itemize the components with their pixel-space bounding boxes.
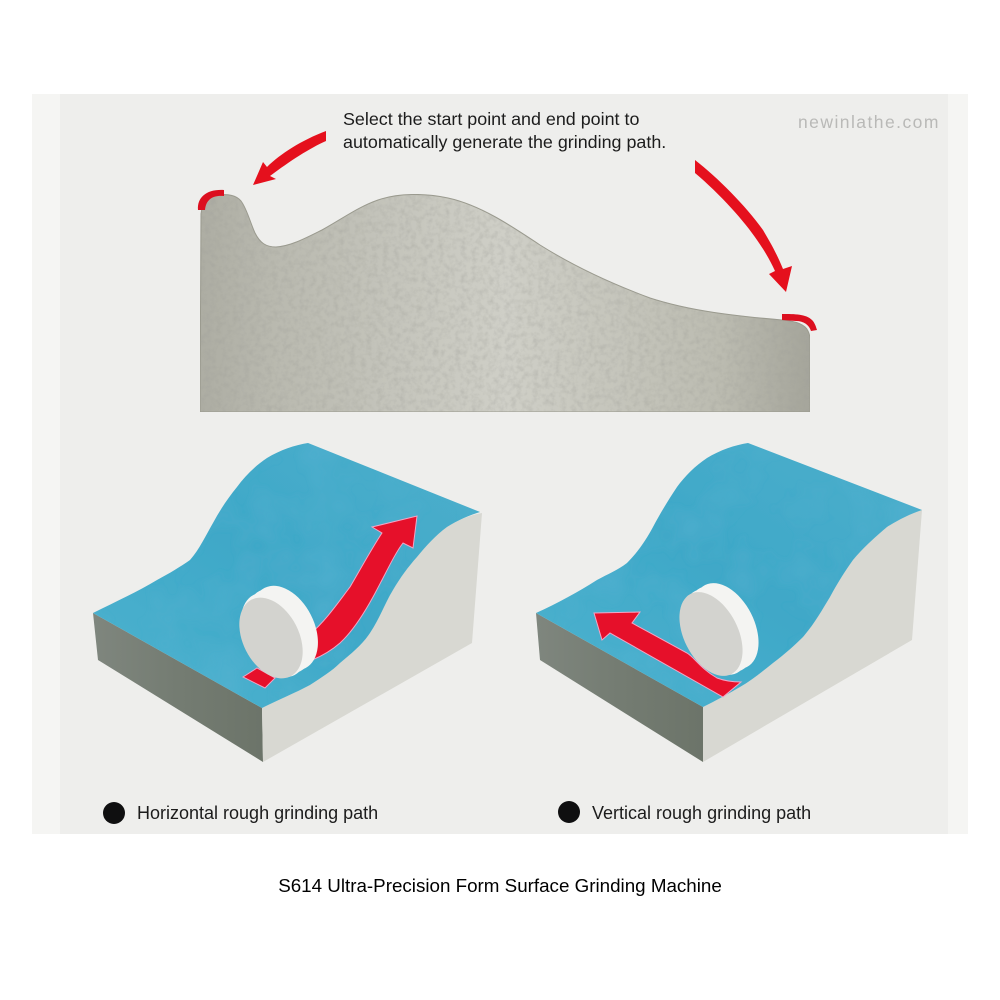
instruction text: automatically generate the grinding path. — [343, 132, 666, 152]
instruction text: Select the start point and end point to — [343, 109, 639, 129]
legend: horizontal: Horizontal rough grinding path — [137, 803, 378, 823]
left face — [536, 613, 703, 762]
legend: vertical: Vertical rough grinding path — [592, 803, 811, 823]
right face — [262, 513, 482, 762]
blue surface — [93, 443, 480, 708]
grinding wheel — [227, 575, 331, 689]
right face — [703, 510, 922, 762]
end point marker — [782, 314, 817, 331]
block: vertical rough grinding — [536, 443, 922, 762]
arrow: to end point — [695, 160, 792, 292]
arrow: vertical path — [594, 612, 741, 697]
instruction text — [343, 109, 666, 152]
left face — [93, 613, 263, 762]
block: horizontal rough grinding — [93, 443, 482, 762]
panel: photographed sheet background — [32, 94, 968, 834]
watermark: newinlathe.com — [798, 112, 940, 132]
arrow tail — [243, 668, 275, 688]
blue surface — [536, 443, 922, 707]
start point marker — [198, 190, 224, 210]
caption: S614 Ultra-Precision Form Surface Grinding Machine — [278, 875, 722, 896]
arrow: horizontal path — [310, 516, 417, 660]
grinding wheel — [667, 572, 772, 686]
workpiece profile — [200, 194, 810, 412]
arrow: to start point — [253, 131, 326, 185]
